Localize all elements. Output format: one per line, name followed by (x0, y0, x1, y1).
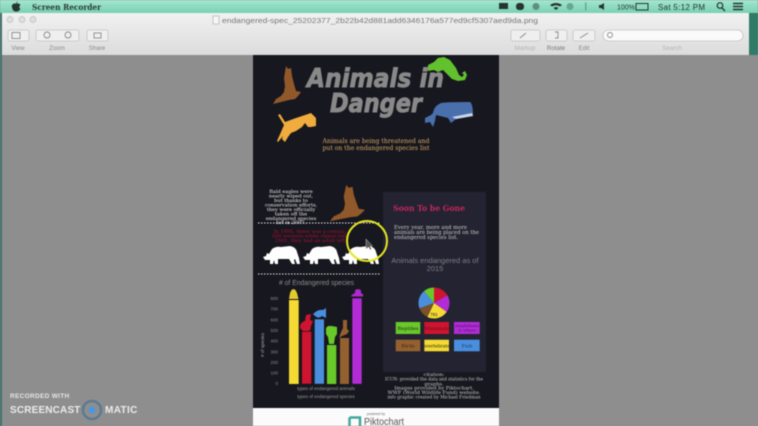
text block: bald eagles: Bald eagles were (269, 189, 313, 195)
text block: bald eagles (265, 189, 318, 226)
text block: bald eagles: nearly wiped out, (269, 194, 314, 200)
panel body: Every year, more and more (394, 225, 467, 231)
y axis: 600 (270, 317, 278, 322)
icon: whale (425, 102, 473, 127)
citation: info graphic created by Michael Friedman (388, 394, 481, 400)
file name: endangered-spec_25202377_2b22b42d881add6346176a577ed9cf5307aed9da.png (222, 16, 538, 25)
traffic lights (7, 16, 36, 22)
toolbar labels: Markup (515, 45, 536, 52)
menu bar: Sat 5:12 PM (658, 3, 705, 12)
icon: rhinos row (263, 246, 379, 264)
subtitle: Animals are being threatened and (322, 137, 430, 145)
y axis: 500 (270, 328, 278, 333)
status icons (499, 2, 604, 10)
text block: rhinos: In 1995, there was a census, (274, 229, 347, 235)
preview window toolbar (2, 13, 749, 55)
text block: bald eagles: taken off the (275, 212, 307, 218)
text block: rhinos: 500 western white rhinos left. (272, 234, 349, 240)
text block: bald eagles: list in 2007. (276, 220, 306, 226)
icon: tiger (277, 113, 316, 142)
bar chart: endangered species: # of species (260, 332, 265, 357)
legend: Invertebrates (421, 344, 453, 350)
app name: Screen Recorder (32, 3, 101, 13)
watermark: screencast-o-matic (10, 393, 138, 419)
icon: eagle small (330, 185, 365, 221)
panel heading: Soon To be Gone (393, 203, 465, 213)
citation: ICUN: provided the data and statistics for the (385, 376, 483, 382)
panel body: animals are being placed on the (394, 230, 479, 236)
text block: rhinos: 2001, they had an adult left (275, 238, 345, 244)
bar chart: endangered species (260, 278, 363, 399)
y axis: 800 (270, 296, 278, 301)
toolbar labels: Edit (579, 45, 590, 52)
title: Danger (330, 89, 424, 119)
y axis: 700 (270, 307, 278, 312)
citation: Images provided by Piktochart. (394, 386, 474, 392)
legend: Birds (401, 344, 415, 350)
toolbar buttons (8, 30, 743, 41)
pie chart (418, 287, 449, 318)
subtitle (322, 137, 430, 152)
cursor highlight circle (347, 221, 387, 261)
clock and battery: 100% (617, 4, 635, 12)
y axis: 400 (270, 339, 278, 344)
toolbar labels: Rotate (547, 45, 566, 52)
chart title: # of Endangered species (279, 278, 354, 287)
text block: bald eagles: conservation efforts, (265, 202, 318, 208)
subtitle: put on the endangered species list (322, 144, 430, 152)
panel: soon to be gone: 2015 (427, 264, 443, 273)
toolbar labels (11, 45, 682, 52)
icon: apple logo (12, 2, 20, 11)
watermark: screencast-o-matic: RECORDED WITH (10, 393, 70, 400)
infographic background (253, 55, 499, 408)
bar top icons (289, 289, 298, 299)
text block: bald eagles: but thanks to (274, 198, 308, 204)
citation (385, 372, 483, 400)
footer: piktochart (253, 408, 499, 426)
legend: Amphibians (454, 323, 479, 328)
bar chart: endangered species: types of endangered species (297, 394, 356, 399)
chart title: Animals endangered as of (391, 256, 479, 265)
axis labels: types of endangered animals (297, 386, 356, 391)
icon: eagle (273, 66, 301, 104)
y axis (270, 296, 278, 386)
legend: & others (458, 328, 476, 332)
divider top (258, 222, 380, 224)
legend: Reptiles (398, 326, 419, 332)
toolbar labels: View (11, 45, 25, 52)
panel: soon to be gone (383, 192, 486, 372)
watermark: screencast-o-matic: MATIC (105, 405, 138, 416)
footer: piktochart: powered by (367, 412, 385, 416)
toolbar labels: Search (662, 45, 682, 52)
y axis: 100 (270, 371, 278, 376)
y axis: 0 (275, 381, 278, 386)
citation: WWF (World Wildlife Fund) website. (388, 389, 481, 396)
icon: chameleon (428, 57, 467, 81)
legend: Fish (462, 344, 473, 350)
y axis: 300 (270, 349, 278, 354)
icon: mouse cursor (366, 239, 372, 250)
text block: rhinos (272, 229, 349, 244)
menu bar (0, 0, 758, 13)
toolbar labels: Zoom (49, 45, 65, 52)
panel body: endangered species list. (394, 235, 458, 241)
text block: bald eagles: they were officially (267, 207, 315, 213)
panel body (394, 225, 479, 241)
legend: Mammals (424, 326, 449, 332)
text block: bald eagles: endangered species (266, 216, 317, 222)
pie chart: 781 (430, 312, 438, 317)
citation: citation: (424, 372, 445, 378)
watermark: screencast-o-matic: SCREENCAST (10, 405, 81, 416)
legend (396, 322, 480, 351)
title (305, 64, 444, 119)
y axis: 200 (270, 360, 278, 365)
bars (289, 300, 299, 384)
toolbar labels: Share (89, 45, 106, 52)
citation: graphs. (424, 382, 444, 388)
title: Animals in (305, 64, 444, 94)
divider bottom (258, 273, 380, 275)
